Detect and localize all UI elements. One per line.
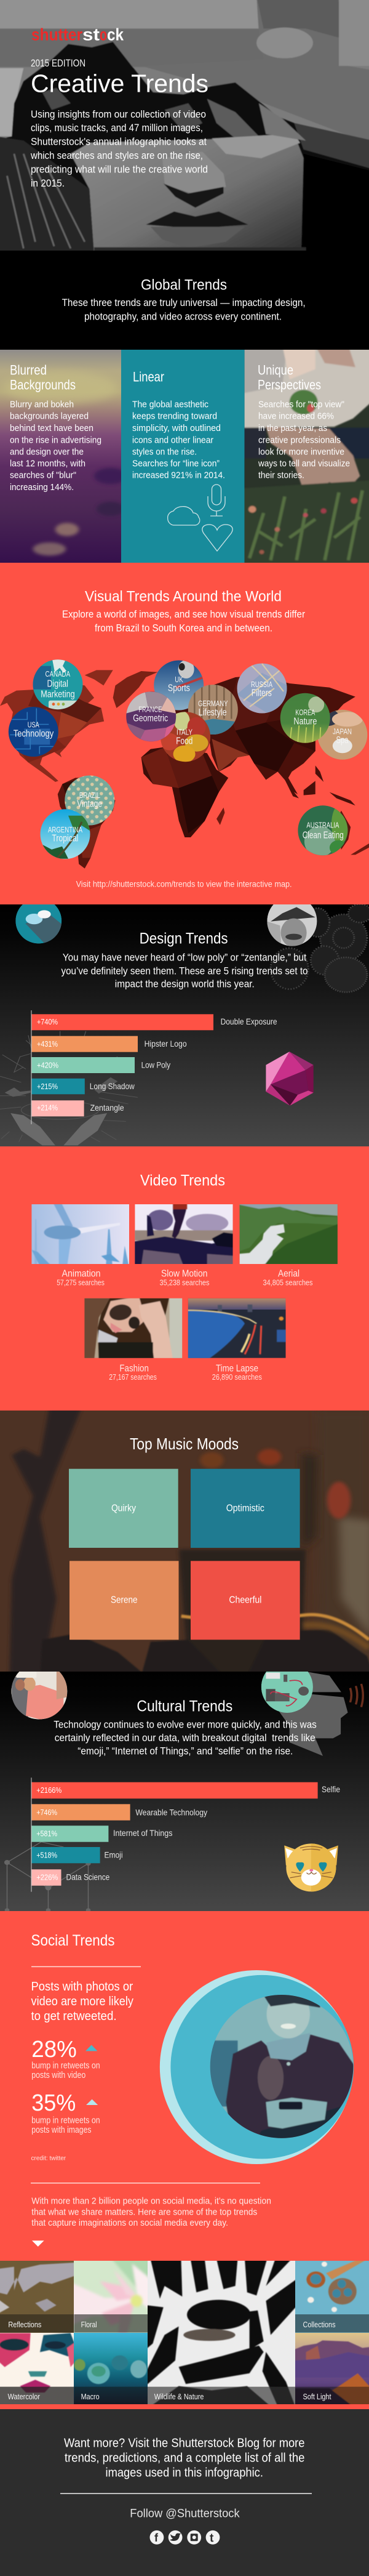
text: retweet lead: video are more likely — [31, 1995, 133, 2008]
photo: macro — [74, 2333, 148, 2404]
text: unique perspectives body: in the past year, as — [258, 423, 327, 433]
illustrations: cultural trends — [4, 1672, 364, 1911]
bar: internet of things: Internet of Things — [113, 1828, 172, 1838]
map label: japan: JAPAN — [333, 727, 352, 736]
illustration: wearable head — [306, 1672, 341, 1692]
text: design trends intro: You may have never heard of “low poly” or “zentangle,” but — [63, 952, 307, 964]
caption: soft light — [295, 2387, 369, 2404]
text: design trends intro — [62, 952, 308, 990]
tile: serene — [69, 1561, 178, 1640]
text: unique perspectives body: have increased 66% — [258, 411, 334, 422]
text: blurred backgrounds body: and design over the — [10, 447, 84, 457]
icon: facebook: f — [154, 2532, 159, 2544]
text: blurred backgrounds body: on the rise in advertising — [10, 435, 101, 445]
map label: australia: Clean Eating — [303, 830, 344, 840]
photo: watercolor — [0, 2333, 74, 2404]
map label: japan — [315, 709, 368, 760]
map label: korea — [280, 693, 330, 743]
bar: emoji: Emoji — [105, 1849, 123, 1859]
label: animation: Animation — [62, 1269, 101, 1279]
bar: low poly: Low Poly — [141, 1060, 170, 1070]
bar: hipster logo: +431% — [37, 1040, 58, 1049]
text: interactive map link: Visit http://shutterstock.com/trends to view the interactive map. — [76, 879, 292, 889]
bar chart: cultural trends — [31, 1777, 340, 1892]
text: unique perspectives body: Searches for "top view" — [258, 399, 344, 409]
illustration: woman with phone in circles — [160, 1970, 354, 2164]
label: fashion — [109, 1363, 157, 1382]
text: blurred backgrounds body: increasing 144%. — [10, 482, 74, 493]
bar: data science: +226% — [36, 1874, 58, 1882]
bar: hipster logo — [32, 1036, 187, 1052]
stat: 35 percent: posts with images — [31, 2125, 91, 2135]
low poly facets — [14, 677, 315, 858]
illustrations: design trends — [0, 904, 369, 1145]
map label: korea: Nature — [293, 717, 317, 727]
bar: wearable technology: Wearable Technology — [135, 1807, 207, 1817]
heading: social trends: Social Trends — [31, 1932, 114, 1949]
map label: russia: Filters — [252, 688, 272, 699]
map label: uk — [154, 660, 204, 710]
heading: unique perspectives: Perspectives — [258, 377, 321, 393]
photo: floral — [74, 2261, 148, 2333]
map label: korea: KOREA — [295, 708, 315, 717]
text: blurred backgrounds body: backgrounds layered — [10, 411, 89, 422]
text: linear body: Searches for “line icon” — [132, 459, 220, 469]
text: unique perspectives body — [258, 399, 350, 481]
map label: france: FRANCE — [138, 705, 162, 714]
text: linear body: The global aesthetic — [132, 399, 208, 409]
intro paragraph: clips, music tracks, and 47 million images, — [31, 122, 203, 134]
bar: zentangle: +214% — [37, 1103, 58, 1112]
panel: footer — [0, 2409, 369, 2576]
icon: cloud — [168, 507, 200, 525]
illustration: zentangle — [271, 904, 369, 992]
heading: unique perspectives: Unique — [258, 363, 293, 378]
bar: selfie: +2166% — [36, 1786, 62, 1795]
text: blurred backgrounds body: searches of "blur" — [10, 470, 76, 481]
video tile: fashion — [82, 1296, 184, 1382]
text: social media paragraph: that capture imaginations on social media every day. — [31, 2218, 228, 2228]
text: visual trends intro: from Brazil to South Korea and in between. — [95, 623, 272, 634]
heading: blurred backgrounds: Blurred — [10, 363, 47, 378]
heading: cultural trends: Cultural Trends — [137, 1697, 232, 1715]
bar: wearable technology: +746% — [36, 1808, 57, 1817]
illustration: emoji cat — [284, 1843, 338, 1891]
text: design trends intro: impact the design world this year. — [115, 978, 255, 990]
text: retweet lead: to get retweeted. — [31, 2010, 117, 2023]
text: global trends intro — [62, 297, 306, 322]
panel: cultural trends — [0, 1661, 369, 1912]
icon: heart — [202, 525, 232, 551]
icon: microphone — [208, 485, 225, 516]
map label: uk: Sports — [168, 683, 190, 694]
video tile: slow motion — [132, 1202, 235, 1287]
bar: internet of things: +581% — [36, 1829, 57, 1838]
bar: emoji: +518% — [36, 1851, 57, 1860]
panel: design trends — [0, 896, 369, 1146]
intro paragraph: predicting what will rule the creative world — [31, 164, 208, 175]
edition label: 2015 EDITION — [31, 58, 85, 69]
text: visual trends intro: Explore a world of images, and see how visual trends differ — [62, 609, 305, 620]
heading: blurred backgrounds: Backgrounds — [10, 377, 76, 393]
map label: germany — [188, 685, 238, 735]
stat: 28 percent: 28% — [31, 2037, 77, 2063]
map label: brazil — [65, 775, 115, 826]
text: social media paragraph — [31, 2196, 271, 2228]
label: aerial: 34,805 searches — [263, 1278, 313, 1287]
photo: reflections — [0, 2261, 74, 2333]
tile: optimistic — [191, 1469, 300, 1548]
label: slow motion: Slow Motion — [161, 1269, 207, 1279]
map label: russia — [237, 663, 287, 714]
text: cultural trends intro — [54, 1719, 317, 1757]
bar: double exposure: +740% — [37, 1018, 58, 1026]
text: follow: Follow @Shutterstock — [130, 2507, 240, 2520]
heading: blurred backgrounds — [10, 363, 76, 393]
text: retweet lead: Posts with photos or — [31, 1980, 133, 1994]
text: design trends intro: you’ve definitely seen them. These are 5 rising trends set to — [62, 965, 308, 976]
icon: instagram — [187, 2530, 201, 2545]
photo: wildlife zebra — [148, 2261, 295, 2404]
video tile: time lapse — [186, 1298, 288, 1382]
tile: quirky: Quirky — [111, 1503, 136, 1513]
text: global trends intro: These three trends are truly universal — impacting design, — [62, 297, 306, 308]
icon: signal waves — [350, 1684, 363, 1707]
bar: selfie — [32, 1782, 340, 1798]
text: retweet lead — [31, 1980, 133, 2023]
caption: floral — [74, 2314, 148, 2332]
text: visual trends intro — [62, 609, 305, 634]
bar chart: design trends — [31, 1010, 277, 1124]
text: global trends intro: photography, and video across every continent. — [84, 311, 282, 322]
tile: cheerful: Cheerful — [229, 1595, 261, 1605]
text: blurred backgrounds body: behind text have been — [10, 423, 93, 433]
map label: france: Geometric — [133, 714, 168, 724]
tile: optimistic: Optimistic — [226, 1503, 264, 1513]
bar: zentangle: Zentangle — [90, 1103, 124, 1113]
text: unique perspectives body: look for more inventive — [258, 447, 344, 457]
world map — [0, 670, 369, 869]
caption: collections — [295, 2314, 369, 2332]
map label: argentina: Tropical — [52, 834, 78, 844]
logo: o — [100, 25, 107, 44]
text: unique perspectives body: their stories. — [258, 470, 304, 481]
label: fashion: Fashion — [119, 1363, 149, 1374]
text: unique perspectives body: creative professionals — [258, 435, 341, 445]
heading: linear: Linear — [133, 369, 164, 384]
arrow: down — [32, 2240, 44, 2247]
stat: 35 percent — [31, 2090, 100, 2135]
label: slow motion: 35,238 searches — [160, 1278, 210, 1287]
text: cultural trends intro: “emoji,” “Internet of Things,” and “selfie” on the rise. — [77, 1745, 293, 1757]
text: social media paragraph: With more than 2 billion people on social media, it’s no question — [31, 2196, 271, 2207]
intro paragraph: Shutterstock's annual infographic looks at — [31, 136, 207, 148]
bar: data science: Data Science — [66, 1872, 109, 1882]
map label: brazil: BRAZIL — [79, 791, 100, 800]
bar: long shadow: Long Shadow — [90, 1081, 135, 1091]
map label: brazil: Vintage — [77, 799, 102, 810]
map label: russia: RUSSIA — [251, 680, 272, 689]
heading: top music moods: Top Music Moods — [130, 1435, 239, 1453]
map label: australia: AUSTRALIA — [306, 820, 339, 829]
panel: global trends header — [0, 251, 369, 350]
bar: selfie: Selfie — [322, 1784, 340, 1794]
map label: argentina — [40, 809, 90, 859]
label: animation — [57, 1269, 105, 1287]
stat: 28 percent: bump in retweets on — [31, 2061, 100, 2071]
map label: uk: UK — [175, 675, 183, 684]
stat: 28 percent — [31, 2037, 100, 2080]
caption: watercolor: Watercolor — [8, 2392, 41, 2401]
bar: hipster logo: Hipster Logo — [145, 1039, 187, 1049]
caption: macro: Macro — [81, 2392, 100, 2401]
video tile: aerial — [237, 1202, 340, 1287]
map label: italy: ITALY — [177, 728, 192, 737]
label: aerial — [263, 1269, 313, 1287]
text: cultural trends intro: certainly reflected in our data, with breakout digital trends like — [55, 1732, 315, 1744]
caption: reflections — [0, 2314, 74, 2332]
illustration: hipster logo — [0, 1031, 138, 1142]
label: time lapse: Time Lapse — [216, 1363, 258, 1374]
text: want more: trends, predictions, and a complete list of all the — [65, 2451, 304, 2465]
text: linear body: increased 921% in 2014. — [132, 470, 225, 481]
title: Creative Trends — [31, 69, 208, 97]
logo — [31, 25, 124, 44]
heading: design trends: Design Trends — [140, 930, 228, 948]
map label: italy — [161, 711, 211, 763]
text: unique perspectives body: ways to tell and visualize — [258, 459, 350, 469]
illustration: long shadow cloud — [15, 904, 62, 943]
bar: zentangle — [32, 1100, 124, 1116]
heading: unique perspectives — [258, 363, 321, 393]
illustration: low poly gem — [266, 1052, 314, 1106]
map label: italy: Food — [176, 736, 192, 747]
tile: serene: Serene — [111, 1595, 138, 1605]
caption: collections: Collections — [303, 2320, 336, 2329]
caption: wildlife and nature — [148, 2387, 295, 2404]
text: blurred backgrounds body: last 12 months, with — [10, 459, 85, 469]
label: aerial: Aerial — [278, 1269, 300, 1279]
illustration: selfie photo — [11, 1672, 68, 1720]
map label: germany: GERMANY — [198, 699, 228, 708]
intro paragraph: in 2015. — [31, 177, 65, 189]
panel: social trends — [0, 1911, 369, 2261]
panel: visual trends around the world — [0, 563, 369, 904]
panel: linear — [121, 350, 245, 563]
bar: double exposure — [32, 1014, 277, 1030]
text: want more: images used in this infographic. — [106, 2466, 263, 2479]
map label: canada: Marketing — [41, 689, 75, 699]
map label: australia — [298, 805, 349, 857]
text: linear body: styles on the rise. — [132, 447, 197, 457]
logo: shutter — [31, 25, 82, 44]
video tile: animation — [31, 1202, 129, 1287]
bar: long shadow: +215% — [37, 1082, 58, 1091]
label: time lapse — [212, 1363, 262, 1382]
tile: quirky — [69, 1469, 178, 1548]
continents base — [0, 670, 369, 869]
caption: soft light: Soft Light — [303, 2392, 331, 2401]
map label: japan: Spa — [336, 735, 349, 746]
credit: credit: twitter — [31, 2155, 66, 2162]
text: linear body: icons and other linear — [132, 435, 213, 445]
photo: soft light — [295, 2333, 369, 2404]
tile: cheerful — [191, 1561, 300, 1640]
bar: wearable technology — [32, 1804, 207, 1821]
bar: long shadow — [32, 1079, 135, 1094]
text: want more: Want more? Visit the Shutterstock Blog for more — [64, 2437, 305, 2450]
text: social media paragraph: that what we share matters. Here are some of the top trends — [31, 2207, 257, 2218]
map label: canada: CANADA — [46, 669, 70, 678]
stat: 28 percent: posts with video — [31, 2071, 85, 2080]
caption: floral: Floral — [81, 2320, 97, 2329]
text: linear body — [132, 399, 225, 481]
caption: watercolor — [0, 2387, 74, 2404]
intro paragraph — [30, 108, 208, 189]
heading: global trends: Global Trends — [141, 277, 227, 294]
map label: usa — [8, 707, 58, 757]
text: linear body: keeps trending toward — [132, 411, 217, 422]
bar: emoji — [32, 1847, 123, 1863]
bar: low poly — [32, 1057, 170, 1073]
bar: low poly: +420% — [37, 1061, 58, 1070]
map label: canada — [33, 659, 83, 710]
heading: video trends: Video Trends — [140, 1172, 225, 1189]
panel: image grid — [0, 2258, 369, 2409]
panel: hero photo — [0, 0, 369, 251]
icon: twitter — [169, 2530, 182, 2545]
text: blurred backgrounds body: Blurry and bokeh — [10, 399, 74, 409]
background concert photo — [0, 1411, 369, 1672]
stat: 35 percent: 35% — [31, 2090, 76, 2116]
icon: facebook — [150, 2530, 164, 2545]
panel: video trends — [0, 1146, 369, 1411]
illustration: double exposure portrait — [267, 904, 317, 946]
logo: st — [82, 25, 100, 44]
heading: visual trends: Visual Trends Around the World — [85, 589, 282, 605]
icon: tumblr — [206, 2530, 220, 2545]
panel: blurred backgrounds — [0, 350, 127, 563]
stat: 35 percent: bump in retweets on — [31, 2116, 100, 2126]
text: blurred backgrounds body — [10, 399, 101, 493]
photo: collections — [295, 2261, 369, 2333]
logo: ck — [107, 25, 124, 44]
map label: usa: Technology — [14, 729, 54, 739]
icon: tumblr: t — [210, 2532, 214, 2545]
illustration: data network — [5, 1842, 90, 1912]
label: time lapse: 26,890 searches — [212, 1372, 262, 1382]
map label: canada: Digital — [47, 679, 68, 690]
bar: internet of things — [32, 1825, 172, 1842]
caption: macro — [74, 2387, 148, 2404]
bar: data science — [32, 1869, 109, 1886]
panel: unique perspectives — [240, 345, 369, 566]
text: want more — [64, 2437, 305, 2479]
text: linear body: simplicity, with outlined — [132, 423, 221, 433]
intro paragraph: Using insights from our collection of video — [31, 108, 206, 120]
caption: wildlife and nature: Wildlife & Nature — [154, 2392, 204, 2401]
illustration: internet of things — [261, 1672, 313, 1713]
label: animation: 57,275 searches — [57, 1278, 105, 1287]
caption: reflections: Reflections — [8, 2320, 42, 2329]
map label: usa: USA — [28, 720, 39, 730]
bar: double exposure: Double Exposure — [221, 1016, 277, 1026]
map label: france — [126, 691, 177, 742]
label: slow motion — [160, 1269, 210, 1287]
text: cultural trends intro: Technology continues to evolve ever more quickly, and this was — [54, 1719, 317, 1731]
panel: top music moods — [0, 1406, 369, 1676]
map label: argentina: ARGENTINA — [48, 825, 82, 834]
map label: germany: Lifestyle — [199, 707, 227, 718]
label: fashion: 27,167 searches — [109, 1372, 157, 1382]
intro paragraph: which searches and styles are on the rise, — [30, 150, 203, 161]
